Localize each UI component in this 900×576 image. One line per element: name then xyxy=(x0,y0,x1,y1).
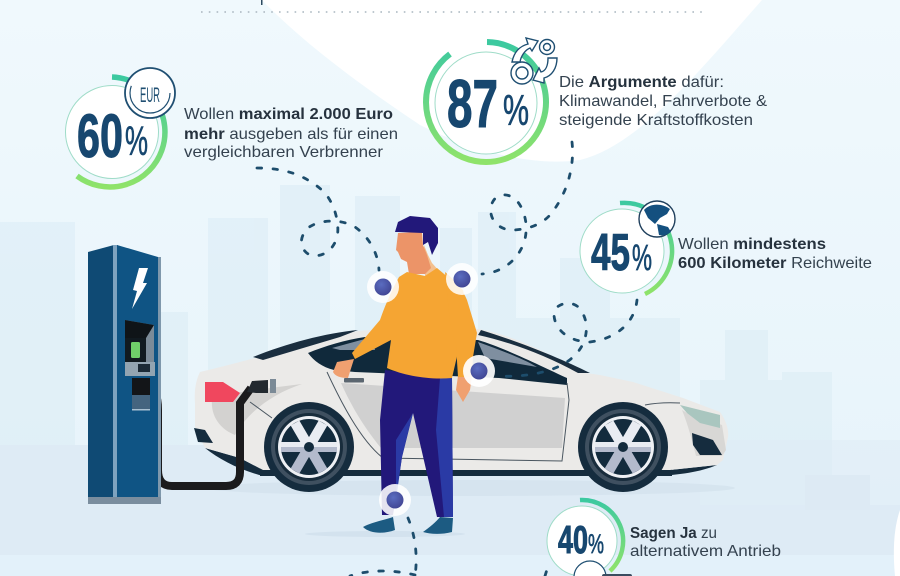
person shadow xyxy=(305,531,465,537)
sweater xyxy=(352,268,464,379)
charge wire xyxy=(250,402,272,418)
hands xyxy=(333,359,472,402)
stat: 60%: % xyxy=(125,118,148,164)
dotted divider xyxy=(201,11,708,13)
value: 40 xyxy=(558,519,588,562)
icon bar xyxy=(602,574,632,576)
progress arc xyxy=(620,203,672,294)
EUR icon: EUR xyxy=(140,84,160,107)
right block xyxy=(805,475,870,510)
door panels xyxy=(341,383,565,448)
charging plug xyxy=(247,379,276,393)
station left face xyxy=(88,245,114,497)
rear wheel xyxy=(264,402,354,492)
car windows xyxy=(308,337,567,385)
shoes xyxy=(363,517,453,534)
roof trim xyxy=(253,330,590,373)
text: 40%: alternativem Antrieb xyxy=(630,543,781,560)
socket xyxy=(132,378,150,410)
hair xyxy=(395,216,438,255)
progress arc xyxy=(77,77,165,187)
right arm xyxy=(445,272,477,377)
ring xyxy=(66,86,158,178)
station side xyxy=(158,257,161,497)
window highlights xyxy=(332,337,537,367)
stat: 40% xyxy=(547,500,632,576)
station stripe xyxy=(113,245,118,497)
ground right xyxy=(700,505,900,555)
tail light xyxy=(205,382,240,402)
pants xyxy=(380,370,453,517)
ring xyxy=(580,209,664,293)
value: 60 xyxy=(77,102,123,170)
partial icon xyxy=(574,561,606,576)
ring xyxy=(547,506,617,576)
stat: 40%: % xyxy=(588,529,604,559)
terminal xyxy=(125,320,155,376)
person xyxy=(333,216,477,534)
connector dashes xyxy=(257,142,637,576)
pants highlight xyxy=(396,378,453,517)
station shadow xyxy=(88,497,161,504)
city skyline xyxy=(0,185,832,512)
text: 60%: Wollen maximal 2.000 Euro xyxy=(184,106,388,123)
text: 45%: 600 Kilometer Reichweite xyxy=(678,255,869,272)
front intake xyxy=(692,433,722,455)
text: 87%: steigende Kraftstoffkosten xyxy=(559,112,753,129)
text: 60%: vergleichbaren Verbrenner xyxy=(184,144,384,161)
car xyxy=(194,328,728,492)
rear vent xyxy=(194,428,213,443)
right notch xyxy=(894,510,900,576)
lower band xyxy=(0,555,900,576)
charging cable xyxy=(147,384,251,486)
car shadow xyxy=(205,480,735,496)
stat: 87%: % xyxy=(503,87,529,135)
station right face xyxy=(117,245,158,497)
charging station xyxy=(88,245,161,504)
fender line xyxy=(645,403,680,405)
stat: 60% xyxy=(66,68,175,187)
front wheel xyxy=(578,402,668,492)
headlight xyxy=(680,405,720,428)
rear quarter panel xyxy=(212,384,302,435)
lightning bolt xyxy=(132,268,148,309)
header tick xyxy=(261,0,262,5)
text: 60%: mehr ausgeben als für einen xyxy=(184,126,391,143)
ground xyxy=(0,445,700,555)
door line xyxy=(327,372,569,461)
door handle xyxy=(344,378,364,382)
neck and face xyxy=(396,232,431,274)
value: 45 xyxy=(591,224,630,282)
car underside xyxy=(205,448,717,476)
globe icon xyxy=(639,201,675,237)
marker dots xyxy=(367,263,495,516)
ring xyxy=(435,52,537,154)
front panel xyxy=(682,410,726,456)
text: 40%: Sagen Ja zu xyxy=(630,525,718,542)
recycle icon xyxy=(511,38,557,84)
right block base xyxy=(700,440,900,510)
stat: 45%: % xyxy=(632,237,652,278)
stat: 45% xyxy=(580,201,675,294)
header white shape xyxy=(262,0,762,162)
text: 45%: Wollen mindestens xyxy=(678,236,822,253)
text: 87%: Klimawandel, Fahrverbote & xyxy=(559,93,767,110)
progress arc xyxy=(426,42,546,162)
progress arc xyxy=(580,500,623,571)
stat: 87% xyxy=(426,38,557,162)
value: 87 xyxy=(447,66,498,142)
neck light xyxy=(424,245,440,278)
text: 87%: Die Argumente dafür: xyxy=(559,74,722,91)
car body xyxy=(195,328,728,470)
